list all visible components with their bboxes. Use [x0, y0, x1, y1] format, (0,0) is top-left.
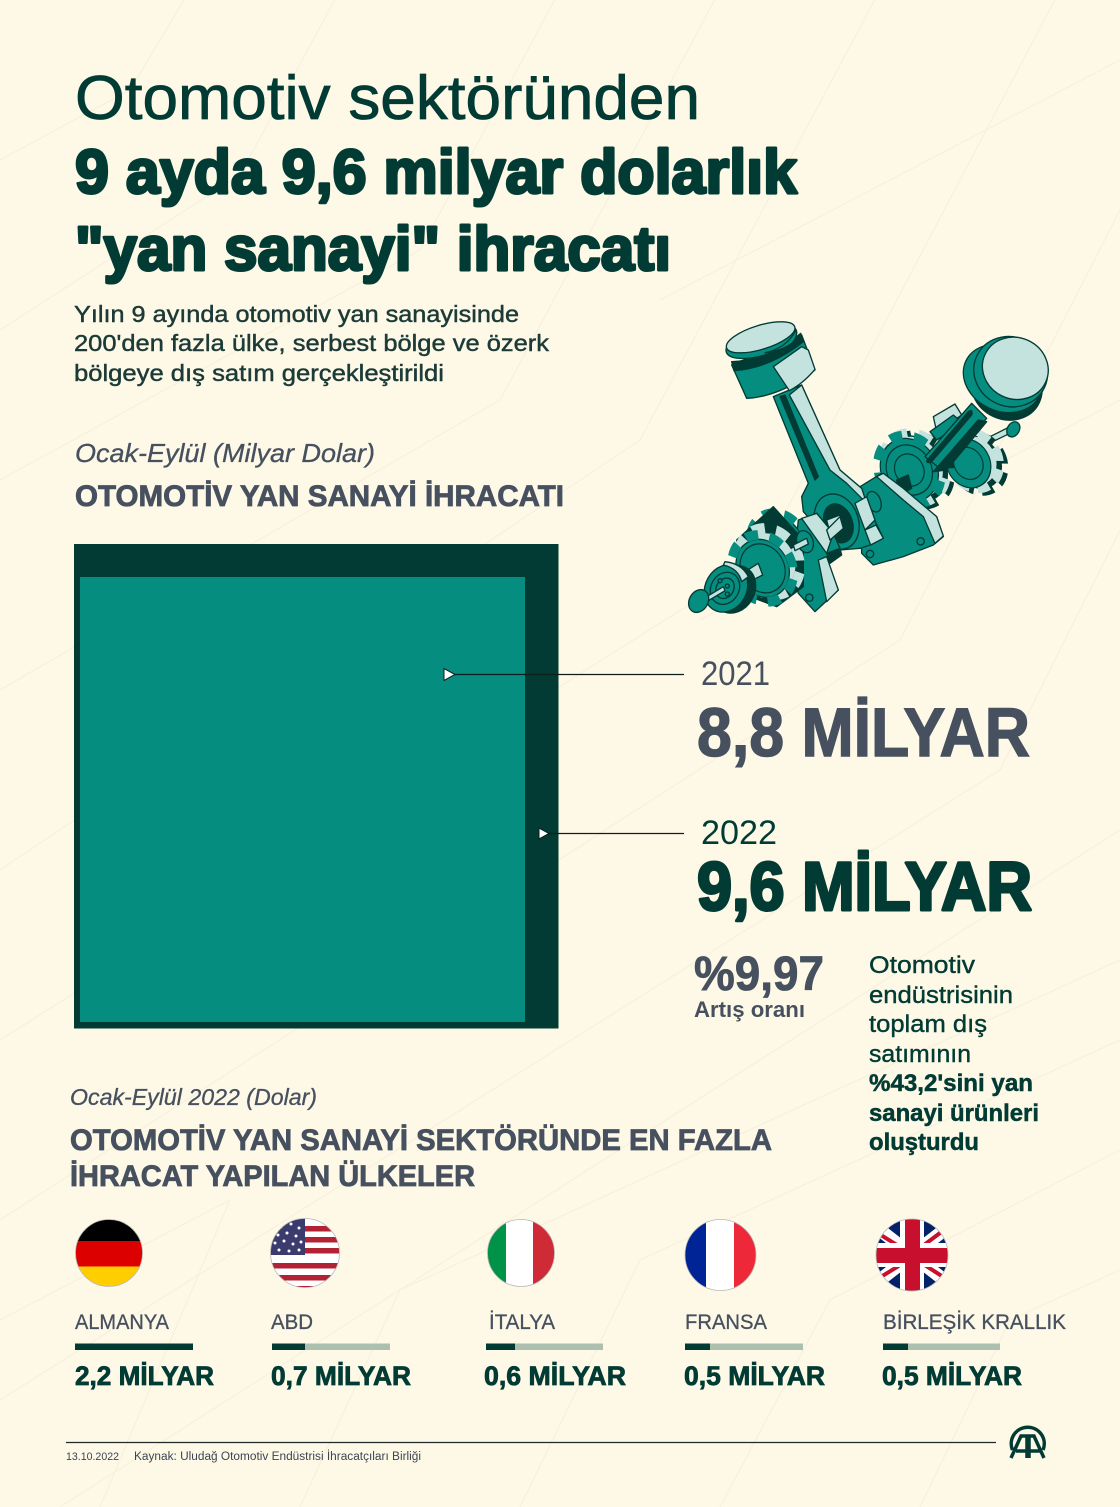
share note: endüstrisinin [869, 982, 1013, 1009]
title [75, 64, 798, 284]
flag: United Kingdom [876, 1219, 948, 1291]
footer [66, 1442, 996, 1463]
value 2022 [697, 814, 1032, 925]
illustration: engine crankshaft and pistons [685, 315, 1059, 621]
country: United Kingdom: BİRLEŞİK KRALLIK [883, 1311, 1066, 1334]
country: France [684, 1219, 825, 1391]
increase rate: Artış oranı [694, 997, 805, 1022]
flag: Italy [487, 1219, 555, 1287]
title: Otomotiv sektöründen [75, 64, 700, 133]
share note: %43,2'sini yan [869, 1070, 1033, 1097]
value 2021 [697, 655, 1030, 771]
piston left rod [773, 385, 883, 556]
chart: nested area squares [74, 544, 684, 1028]
section heading: export: OTOMOTİV YAN SANAYİ İHRACATI [75, 480, 564, 513]
pulley [685, 557, 764, 621]
section heading: countries: OTOMOTİV YAN SANAYİ SEKTÖRÜNDE EN FAZLA [70, 1124, 772, 1157]
title: "yan sanayi" ihracatı [75, 215, 671, 284]
country: USA: ABD [271, 1311, 313, 1334]
subtitle [74, 301, 550, 386]
increase rate [694, 948, 824, 1022]
subtitle: bölgeye dış satım gerçekleştirildi [74, 360, 444, 386]
value 2021: 8,8 MİLYAR [697, 694, 1030, 771]
country: Germany: ALMANYA [75, 1311, 169, 1334]
flag: USA [270, 1218, 340, 1289]
section label: countries period: Ocak-Eylül 2022 (Dolar) [70, 1084, 317, 1110]
country: Italy: İTALYA [489, 1311, 555, 1334]
share note: toplam dış [869, 1011, 987, 1038]
share note: Otomotiv [869, 952, 975, 979]
country: France: FRANSA [685, 1311, 767, 1334]
flag: Germany [75, 1219, 143, 1288]
share note: oluşturdu [869, 1129, 979, 1156]
crank web left [793, 513, 843, 612]
subtitle: Yılın 9 ayında otomotiv yan sanayisinde [74, 301, 519, 327]
section heading: countries [70, 1124, 772, 1193]
country: USA: 0,7 MİLYAR [271, 1361, 411, 1391]
subtitle: 200'den fazla ülke, serbest bölge ve özerk [74, 330, 550, 356]
country: Germany [75, 1219, 214, 1391]
section heading: countries: İHRACAT YAPILAN ÜLKELER [70, 1160, 475, 1193]
second gear [865, 404, 963, 516]
front gear [720, 503, 817, 613]
flag: France [684, 1219, 757, 1291]
far shaft end [990, 419, 1023, 442]
share note: sanayi ürünleri [869, 1100, 1039, 1127]
value 2022: 9,6 MİLYAR [697, 848, 1032, 925]
share note [869, 952, 1039, 1156]
country: France: 0,5 MİLYAR [684, 1361, 825, 1391]
section label: export period: Ocak-Eylül (Milyar Dolar) [75, 438, 375, 468]
country: Germany: 2,2 MİLYAR [75, 1361, 214, 1391]
far gear [937, 424, 1014, 500]
piston right [925, 324, 1059, 472]
piston left head [722, 315, 815, 398]
footer: Kaynak: Uludağ Otomotiv Endüstrisi İhracatçıları Birliği [134, 1450, 421, 1463]
icon: AA logo [1011, 1427, 1044, 1458]
country: Italy [484, 1219, 626, 1391]
share note: satımının [869, 1041, 971, 1068]
country: Italy: 0,6 MİLYAR [484, 1361, 626, 1391]
increase rate: %9,97 [694, 948, 824, 1001]
value 2021: 2021 [701, 655, 770, 693]
value 2022: 2022 [701, 814, 777, 852]
crank web centre [860, 473, 943, 565]
footer: 13.10.2022 [66, 1451, 119, 1463]
title: 9 ayda 9,6 milyar dolarlık [75, 138, 798, 207]
country: United Kingdom [876, 1219, 1066, 1391]
country: USA [270, 1218, 411, 1391]
country: United Kingdom: 0,5 MİLYAR [882, 1361, 1022, 1391]
